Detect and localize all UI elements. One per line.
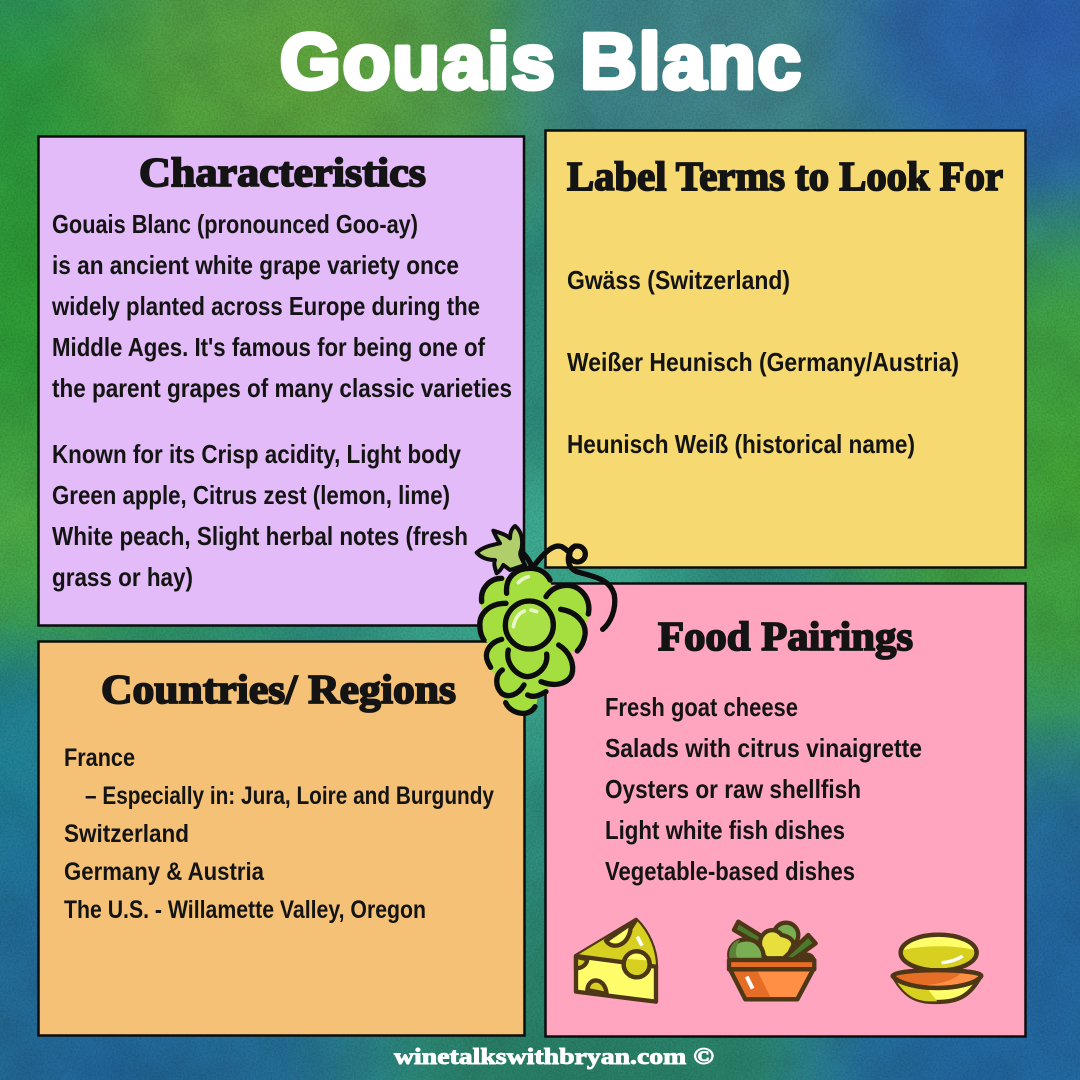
- leaf: [477, 526, 525, 573]
- text: label term list: Weißer Heunisch (Germany/Austria): [567, 347, 959, 377]
- icon: cheese: [576, 920, 656, 1002]
- icon: grape bunch: [477, 526, 615, 715]
- text: description: [51, 209, 512, 403]
- text: tasting notes: Green apple, Citrus zest (lemon, lime): [52, 480, 450, 510]
- text: country list: Switzerland: [64, 820, 189, 848]
- text: food list: Vegetable-based dishes: [605, 856, 855, 886]
- text: description: widely planted across Europe during the: [51, 291, 480, 321]
- title: Gouais Blanc: [280, 17, 801, 105]
- text: description: Gouais Blanc (pronounced Goo-ay): [52, 209, 418, 239]
- text: country list: The U.S. - Willamette Valley, Oregon: [64, 896, 426, 924]
- text: label term list: [567, 265, 959, 459]
- text: country list: France: [64, 744, 135, 772]
- text: description: Middle Ages. It's famous for being one of: [52, 332, 485, 362]
- panel: characteristics: [38, 136, 524, 626]
- panel: label terms: [546, 130, 1026, 568]
- text: tasting notes: grass or hay): [52, 562, 193, 592]
- text: food list: Salads with citrus vinaigrette: [605, 733, 922, 763]
- heading: countries: Countries/ Regions: [101, 666, 456, 712]
- text: food list: Oysters or raw shellfish: [605, 774, 861, 804]
- text: food list: Fresh goat cheese: [605, 692, 798, 722]
- text: tasting notes: [52, 439, 468, 592]
- text: country list: [64, 744, 494, 924]
- text: tasting notes: Known for its Crisp acidity, Light body: [52, 439, 461, 469]
- heading: characteristics: Characteristics: [139, 149, 426, 195]
- footer credit: winetalkswithbryan.com ©: [394, 1044, 714, 1069]
- text: food list: [605, 692, 922, 886]
- text: country list: Germany & Austria: [64, 858, 265, 886]
- text: description: is an ancient white grape variety once: [52, 250, 459, 280]
- text: description: the parent grapes of many classic varieties: [52, 373, 512, 403]
- text: country list: – Especially in: Jura, Loire and Burgundy: [85, 782, 494, 810]
- grape berries: [479, 568, 591, 715]
- text: tasting notes: White peach, Slight herbal notes (fresh: [52, 521, 468, 551]
- text: food list: Light white fish dishes: [605, 815, 845, 845]
- text: label term list: Heunisch Weiß (historical name): [567, 429, 915, 459]
- heading: label terms: Label Terms to Look For: [567, 153, 1003, 199]
- icon: salad bowl: [729, 922, 816, 999]
- icon: oyster: [893, 935, 981, 1002]
- heading: food pairings: Food Pairings: [658, 613, 913, 659]
- panel: countries and regions: [38, 642, 524, 1036]
- panel: food pairings: [546, 584, 1026, 1036]
- text: label term list: Gwäss (Switzerland): [567, 265, 790, 295]
